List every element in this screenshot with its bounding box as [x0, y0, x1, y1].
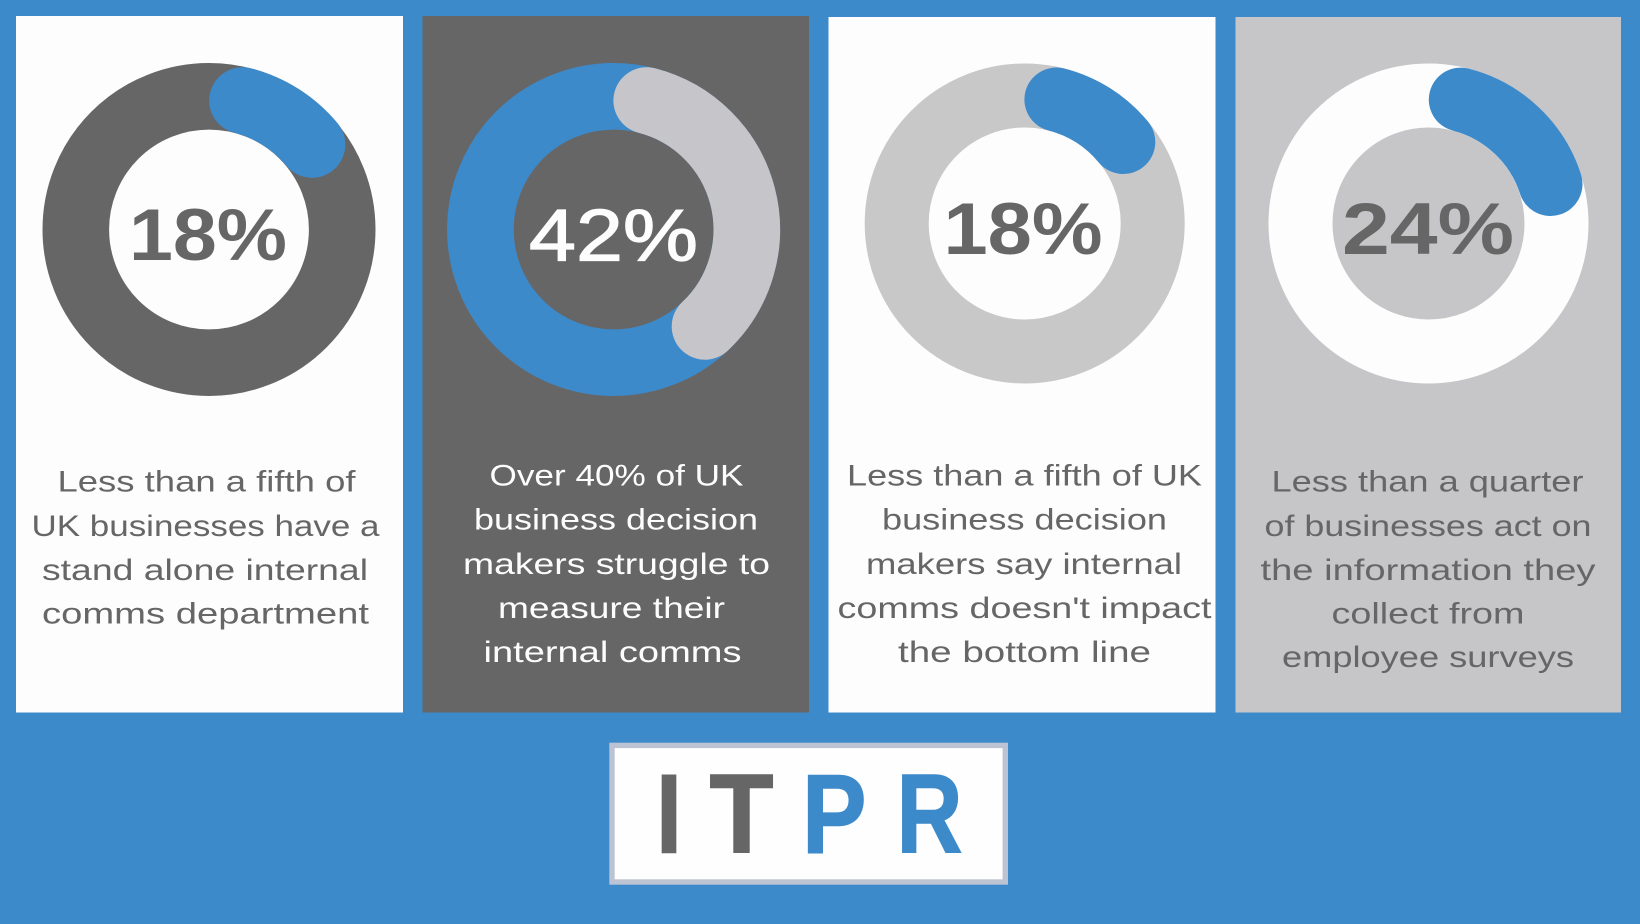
logo: ITPR: R — [896, 752, 962, 877]
percentage: 24%: 24% — [1342, 189, 1514, 270]
text: department description: stand alone internal — [42, 554, 368, 587]
text: surveys description: the information they — [1260, 554, 1596, 587]
logo: ITPR: P — [802, 752, 866, 877]
text: bottom line description: the bottom line — [898, 636, 1151, 669]
text: surveys description — [1260, 466, 1596, 674]
logo: ITPR: I — [656, 752, 682, 877]
text: department description: UK businesses have a — [32, 510, 380, 543]
panel: stand alone department — [16, 16, 403, 712]
text: measurement description: internal comms — [484, 636, 742, 669]
text: measurement description — [463, 460, 770, 669]
text: bottom line description: business decision — [882, 504, 1167, 536]
percentage: 18%: 18% — [129, 195, 287, 276]
text: surveys description: of businesses act on — [1264, 510, 1592, 543]
logo: ITPR: T — [710, 752, 774, 877]
donut chart: 24% white — [1300, 96, 1556, 352]
text: surveys description: employee surveys — [1282, 641, 1574, 674]
text: surveys description: Less than a quarter — [1272, 466, 1584, 499]
donut chart: 18% light grey — [897, 96, 1153, 352]
donut chart: 18% dark — [76, 96, 342, 363]
panel: struggle to measure — [422, 16, 809, 712]
donut chart: 42% blue and light grey — [480, 96, 747, 363]
text: bottom line description — [838, 460, 1212, 669]
text: measurement description: measure their — [498, 592, 725, 625]
text: department description — [32, 466, 380, 631]
text: bottom line description: comms doesn't impact — [838, 592, 1212, 625]
text: measurement description: business decision — [474, 504, 758, 536]
percentage: 18%: 18% — [944, 189, 1102, 270]
text: measurement description: makers struggle to — [463, 548, 770, 581]
logo: ITPR — [612, 745, 1005, 882]
text: department description: Less than a fifth of — [58, 466, 356, 499]
text: measurement description: Over 40% of UK — [490, 460, 744, 493]
text: department description: comms department — [42, 598, 370, 631]
text: surveys description: collect from — [1332, 598, 1524, 631]
panel: employee surveys — [1236, 17, 1621, 712]
text: bottom line description: Less than a fifth of UK — [847, 460, 1202, 493]
text: bottom line description: makers say internal — [866, 548, 1182, 581]
panel: bottom line impact — [828, 17, 1216, 712]
percentage: 42%: 42% — [529, 196, 698, 276]
